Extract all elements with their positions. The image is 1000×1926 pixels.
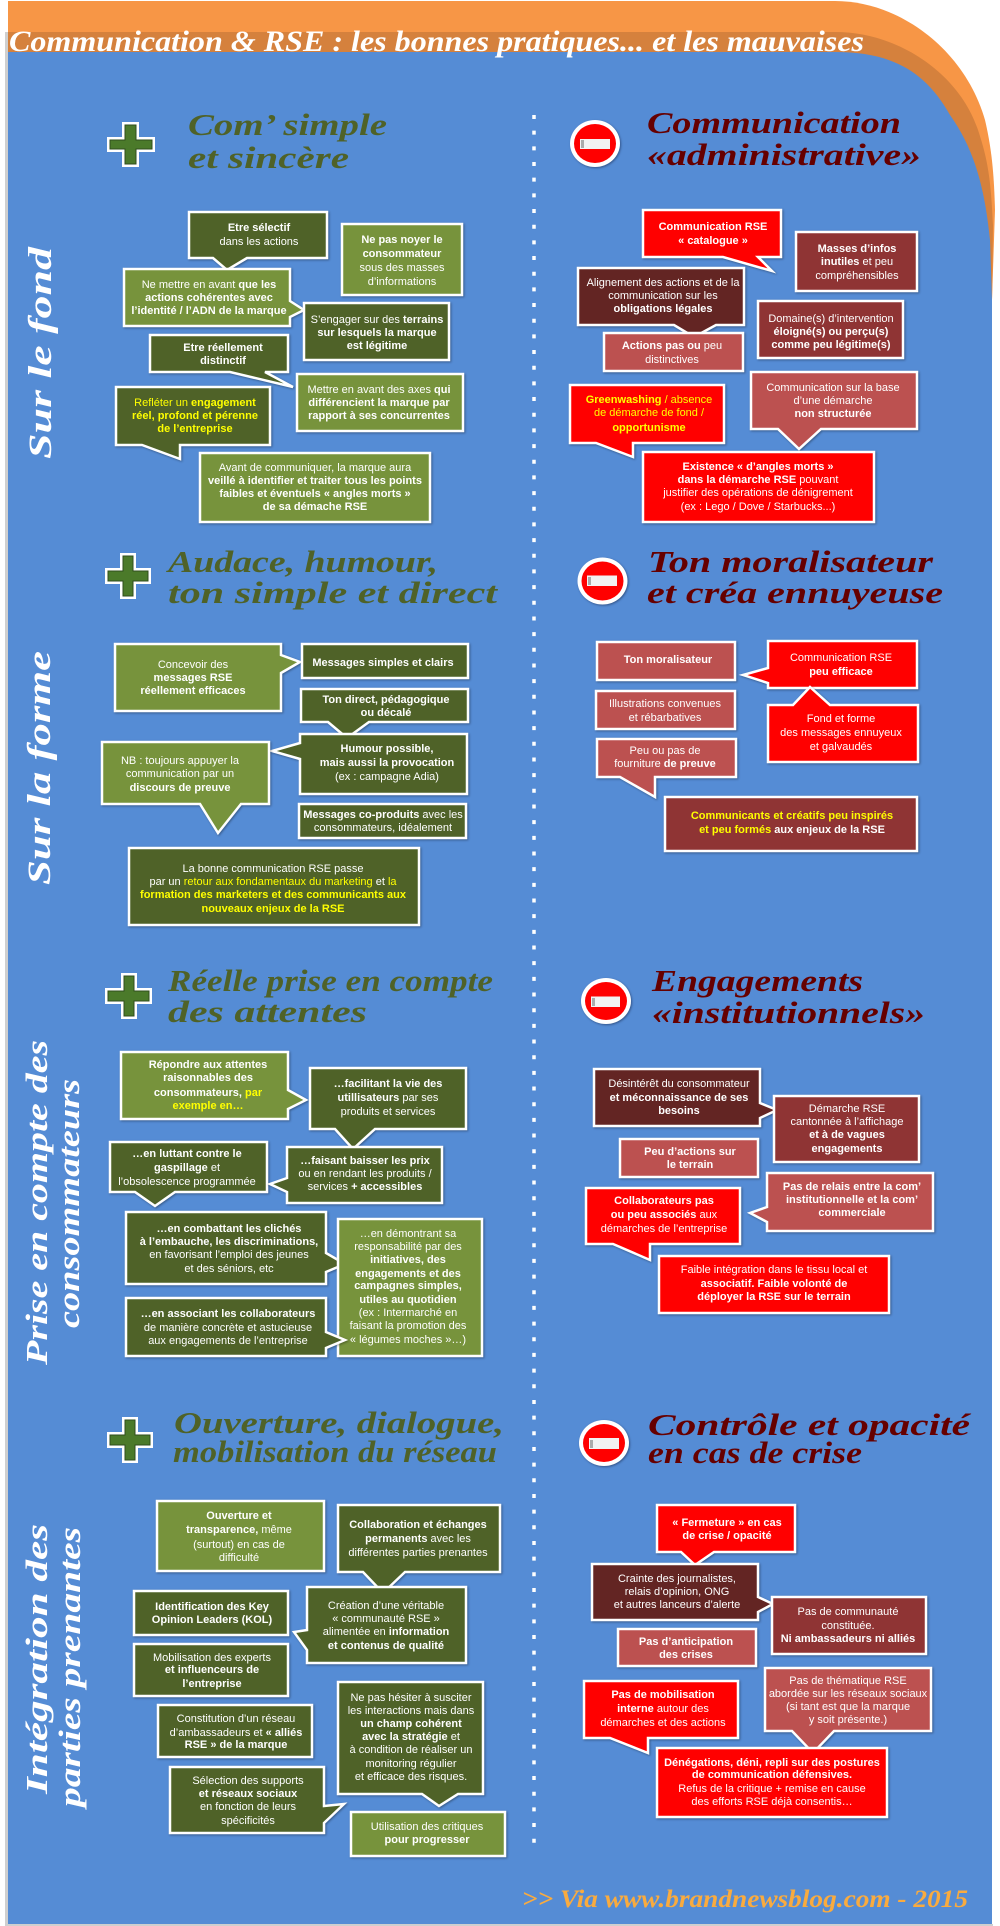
callout: en luttant: …en luttant contre le bbox=[132, 1148, 242, 1160]
callout: Collaboration bbox=[338, 1505, 500, 1593]
callout: Ton direct: ou décalé bbox=[361, 707, 411, 719]
callout: Pas de thématique RSE: Pas de thématique RSE bbox=[789, 1675, 907, 1687]
box: Pas de communauté: Ni ambassadeurs ni alliés bbox=[781, 1633, 915, 1645]
callout: Etre réellement distinctif: distinctif bbox=[200, 355, 246, 367]
callout: Refléter un engagement: réel, profond et pérenne bbox=[132, 410, 258, 422]
box: Mettre en avant des axes: différencient la marque par bbox=[308, 397, 450, 409]
box: Faible intégration: Faible intégration dans le tissu local et bbox=[681, 1264, 867, 1276]
callout: Humour: (ex : campagne Adia) bbox=[335, 771, 439, 783]
callout: en associant: de manière concrète et astucieuse bbox=[144, 1322, 312, 1334]
box: Démarche RSE: engagements bbox=[812, 1143, 882, 1155]
icon: no entry bbox=[578, 558, 628, 604]
callout: Concevoir bbox=[115, 644, 300, 711]
box: Domaine(s): comme peu légitime(s) bbox=[771, 339, 891, 351]
heading: mobilisation du réseau bbox=[173, 1434, 497, 1469]
heading bbox=[173, 1405, 504, 1469]
footer credit: >> Via www.brandnewsblog.com - 2015 bbox=[522, 1886, 968, 1913]
box: Ne pas noyer bbox=[342, 224, 462, 295]
main title: Communication & RSE : les bonnes pratiques... et les mauvaises bbox=[9, 25, 864, 58]
box: Pas de communauté: constituée. bbox=[821, 1620, 875, 1632]
panel: Engagements institutionnels bbox=[581, 963, 933, 1313]
box: Ouverture et transparence: (surtout) en cas de bbox=[193, 1539, 285, 1551]
callout: NB: communication par un bbox=[126, 768, 234, 780]
callout: Alignement: obligations légales bbox=[613, 303, 713, 315]
callout: Fermeture bbox=[657, 1505, 795, 1565]
callout: Peu ou pas de fourniture de preuve: fourniture de preuve bbox=[614, 758, 716, 770]
box: Utilisation des critiques: pour progresser bbox=[385, 1834, 470, 1846]
box: Constitution réseau: d’ambassadeurs et « alliés bbox=[170, 1727, 302, 1739]
callout: NB: NB : toujours appuyer la bbox=[121, 755, 240, 767]
callout: Création communauté: Création d’une véritable bbox=[328, 1600, 444, 1612]
box: S'engager: S’engager sur des terrains bbox=[311, 314, 443, 326]
box: Démarche RSE: et à de vagues bbox=[809, 1129, 885, 1141]
callout: Communication RSE catalogue: « catalogue » bbox=[678, 235, 748, 247]
callout: Communication RSE peu efficace: Communication RSE bbox=[790, 652, 892, 664]
callout: Fermeture: « Fermeture » en cas bbox=[672, 1517, 782, 1529]
heading: Audace, humour, bbox=[166, 544, 438, 579]
box: Dénégations: de communication défensives. bbox=[692, 1769, 852, 1781]
box: Actions pas ou peu: Actions pas ou peu bbox=[622, 340, 722, 352]
panel: Ton moralisateur bbox=[578, 544, 943, 851]
box: S'engager: est légitime bbox=[347, 340, 407, 352]
box: La bonne communication: formation des marketers et des communicants aux bbox=[140, 889, 407, 901]
box: Dénégations: des efforts RSE déjà consentis… bbox=[691, 1796, 853, 1808]
box: Actions pas ou peu bbox=[604, 333, 743, 371]
callout: en luttant: gaspillage et bbox=[154, 1162, 220, 1174]
box: Messages co-produits bbox=[299, 804, 466, 838]
box: Ton moralisateur bbox=[597, 642, 735, 680]
box: Actions pas ou peu: distinctives bbox=[645, 354, 699, 366]
callout: Communication RSE peu efficace bbox=[743, 641, 917, 688]
callout: Pas de thématique RSE: y soit présente.) bbox=[809, 1714, 887, 1726]
callout: en combattant: …en combattant les clichés bbox=[157, 1223, 301, 1235]
box: Peu d'actions: le terrain bbox=[667, 1159, 714, 1171]
callout: Etre sélectif: Etre sélectif bbox=[228, 222, 291, 234]
callout: Collaborateurs: démarches de l’entreprise bbox=[601, 1223, 727, 1235]
box: Masses d'infos: Masses d’infos bbox=[818, 243, 896, 255]
box: Dénégations: Refus de la critique + remise en cause bbox=[678, 1783, 866, 1795]
callout: Création communauté bbox=[294, 1587, 466, 1663]
callout: en luttant bbox=[110, 1142, 267, 1206]
callout: Fond et forme bbox=[768, 687, 918, 762]
callout: Désintérêt: Désintérêt du consommateur bbox=[608, 1078, 750, 1090]
box: Ne pas noyer: d’informations bbox=[368, 276, 437, 288]
callout: en combattant: et des séniors, etc bbox=[184, 1263, 274, 1275]
box: Mettre en avant des axes: Mettre en avant des axes qui bbox=[307, 384, 451, 396]
box: Communicants et créatifs: et peu formés aux enjeux de la RSE bbox=[699, 824, 885, 836]
callout: Concevoir: Concevoir des bbox=[158, 659, 229, 671]
callout: faisant baisser: services + accessibles bbox=[308, 1181, 422, 1193]
callout: Crainte des journalistes: relais d’opinion, ONG bbox=[625, 1586, 729, 1598]
callout: Communication RSE catalogue bbox=[643, 210, 781, 271]
callout: Communication non structurée: d’une démarche bbox=[794, 395, 872, 407]
heading bbox=[648, 1407, 972, 1470]
callout: Collaboration: permanents avec les bbox=[365, 1533, 471, 1545]
icon: plus bbox=[105, 973, 152, 1019]
box: Communicants et créatifs bbox=[665, 797, 917, 851]
callout: Fermeture: de crise / opacité bbox=[682, 1530, 772, 1542]
callout: Pas de thématique RSE: abordée sur les réseaux sociaux bbox=[769, 1688, 928, 1700]
callout: Désintérêt: besoins bbox=[658, 1105, 700, 1117]
box: Mobilisation des experts: Mobilisation des experts bbox=[153, 1652, 271, 1664]
side label: Intégration des parties prenantes bbox=[19, 1524, 87, 1811]
panel: Audace, humour bbox=[102, 544, 499, 925]
callout: Ne pas hésiter: Ne pas hésiter à susciter bbox=[350, 1692, 472, 1704]
box: Dénégations bbox=[657, 1748, 887, 1817]
callout: Greenwashing: de démarche de fond / bbox=[594, 407, 705, 419]
panel: Réelle prise en compte des attentes bbox=[105, 963, 493, 1356]
callout: Ne pas hésiter: monitoring régulier bbox=[365, 1758, 457, 1770]
callout: Création communauté: et contenus de qualité bbox=[328, 1640, 444, 1652]
callout: faisant baisser bbox=[270, 1147, 442, 1203]
callout: Peu ou pas de fourniture de preuve bbox=[597, 739, 736, 797]
box: La bonne communication bbox=[129, 848, 419, 925]
callout: Sélection des supports: et réseaux sociaux bbox=[199, 1788, 298, 1800]
box: Existence d'angles morts: Existence « d’angles morts » bbox=[682, 461, 834, 473]
box: en démontrant bbox=[338, 1219, 482, 1356]
box: Ne pas noyer: consommateur bbox=[363, 248, 442, 260]
callout: Répondre aux attentes: consommateurs, par bbox=[154, 1087, 263, 1099]
callout: en combattant: à l’embauche, les discriminations, bbox=[140, 1236, 318, 1248]
heading: Contrôle et opacité bbox=[648, 1407, 972, 1442]
box: Domaine(s): Domaine(s) d’intervention bbox=[768, 313, 894, 325]
heading: Réelle prise en compte bbox=[167, 963, 493, 998]
heading: en cas de crise bbox=[648, 1435, 862, 1470]
callout: Répondre aux attentes bbox=[121, 1052, 306, 1119]
callout: Humour: mais aussi la provocation bbox=[320, 757, 455, 769]
heading: Ton moralisateur bbox=[648, 544, 934, 579]
box: en démontrant: utiles au quotidien bbox=[359, 1294, 457, 1306]
callout: Communication RSE peu efficace: peu efficace bbox=[809, 666, 873, 678]
box: Dénégations: Dénégations, déni, repli sur des postures bbox=[664, 1757, 880, 1769]
box: Identification KOL: Opinion Leaders (KOL) bbox=[152, 1614, 273, 1626]
panel: Contrôle et opacité bbox=[579, 1407, 972, 1817]
box: Mettre en avant des axes: rapport à ses concurrentes bbox=[308, 410, 450, 422]
icon: plus bbox=[107, 1417, 153, 1463]
callout: Greenwashing bbox=[570, 385, 724, 457]
callout: Concevoir: réellement efficaces bbox=[140, 685, 246, 697]
callout: Ne pas hésiter: et efficace des risques. bbox=[355, 1771, 467, 1783]
heading: Engagements bbox=[651, 963, 863, 998]
box: en démontrant: faisant la promotion des bbox=[350, 1320, 467, 1332]
box: Messages co-produits: Messages co-produits avec les bbox=[303, 809, 463, 821]
callout: Sélection des supports bbox=[170, 1767, 344, 1833]
panel: Communication administrative bbox=[570, 105, 921, 522]
callout: Ne pas hésiter bbox=[338, 1682, 483, 1806]
box: Illustrations: Illustrations convenues bbox=[609, 698, 721, 710]
callout: Pas de mobilisation: démarches et des actions bbox=[600, 1717, 726, 1729]
box: en démontrant: (ex : Intermarché en bbox=[359, 1307, 457, 1319]
callout: Ne mettre en avant: Ne mettre en avant que les bbox=[142, 279, 276, 291]
callout: Désintérêt bbox=[594, 1069, 777, 1126]
box: Existence d'angles morts: (ex : Lego / Dove / Starbucks...) bbox=[681, 501, 835, 513]
callout: Etre sélectif bbox=[189, 212, 327, 270]
box: Identification KOL bbox=[134, 1591, 288, 1635]
callout: Concevoir: messages RSE bbox=[154, 672, 232, 684]
box: Illustrations bbox=[596, 691, 735, 729]
callout: Pas de mobilisation: Pas de mobilisation bbox=[611, 1689, 715, 1701]
heading: ton simple et direct bbox=[168, 575, 499, 610]
heading: «administrative» bbox=[647, 137, 921, 172]
callout: faisant baisser: …faisant baisser les prix bbox=[300, 1155, 431, 1167]
central dotted divider bbox=[532, 115, 536, 1854]
callout: Communication non structurée: non structurée bbox=[794, 408, 872, 420]
callout: Crainte des journalistes: Crainte des journalistes, bbox=[618, 1573, 736, 1585]
callout: Humour: Humour possible, bbox=[341, 743, 433, 755]
box: Masses d'infos bbox=[796, 232, 917, 291]
panel: Ouverture, dialogue bbox=[107, 1405, 505, 1856]
callout: Refléter un engagement: de l’entreprise bbox=[157, 423, 233, 435]
callout: Répondre aux attentes: raisonnables des bbox=[163, 1072, 253, 1084]
box: Avant de communiquer: faibles et éventuels « angles morts » bbox=[219, 488, 411, 500]
heading: Ouverture, dialogue, bbox=[174, 1405, 504, 1440]
callout: Peu ou pas de fourniture de preuve: Peu ou pas de bbox=[630, 745, 700, 757]
callout: Répondre aux attentes: exemple en… bbox=[173, 1100, 243, 1112]
box: en démontrant: engagements et des bbox=[355, 1268, 461, 1280]
callout: facilitant: produits et services bbox=[341, 1106, 436, 1118]
box: Pas de communauté bbox=[772, 1597, 926, 1654]
callout: Sélection des supports: en fonction de leurs bbox=[200, 1801, 297, 1813]
box: en démontrant: initiatives, des bbox=[370, 1254, 446, 1266]
icon: no entry bbox=[579, 1420, 629, 1466]
side label: Prise en compte des consommateurs: consommateurs bbox=[51, 1079, 86, 1328]
heading bbox=[647, 544, 943, 610]
box: La bonne communication: La bonne communication RSE passe bbox=[182, 863, 364, 875]
box: Pas d'anticipation: Pas d’anticipation bbox=[639, 1636, 733, 1648]
callout: Ne mettre en avant: actions cohérentes avec bbox=[145, 292, 273, 304]
box: Démarche RSE: Démarche RSE bbox=[809, 1103, 885, 1115]
icon: plus bbox=[105, 553, 151, 599]
callout: Pas de relais: Pas de relais entre la com’ bbox=[783, 1181, 921, 1193]
callout: Greenwashing: Greenwashing / absence bbox=[586, 394, 712, 406]
heading bbox=[166, 544, 499, 610]
box: Faible intégration: déployer la RSE sur le terrain bbox=[697, 1291, 851, 1303]
callout: en associant: …en associant les collaborateurs bbox=[141, 1308, 315, 1320]
box: Mettre en avant des axes bbox=[297, 374, 463, 431]
heading bbox=[188, 107, 387, 175]
callout: Etre réellement distinctif: Etre réellement bbox=[183, 342, 263, 354]
heading bbox=[651, 963, 925, 1030]
callout: Fond et forme: des messages ennuyeux bbox=[780, 727, 902, 739]
callout: Collaboration: différentes parties prenantes bbox=[348, 1547, 488, 1559]
callout: Ne pas hésiter: un champ cohérent bbox=[360, 1718, 462, 1730]
box: Constitution réseau: Constitution d’un réseau bbox=[177, 1713, 295, 1725]
box: Existence d'angles morts: justifier des opérations de dénigrement bbox=[662, 487, 853, 499]
box: Avant de communiquer: veillé à identifier et traiter tous les points bbox=[208, 475, 422, 487]
callout: Greenwashing: opportunisme bbox=[612, 422, 686, 434]
icon: no entry bbox=[581, 978, 631, 1024]
box: Mobilisation des experts: et influenceurs de bbox=[165, 1664, 259, 1676]
callout: facilitant: utillisateurs par ses bbox=[338, 1092, 439, 1104]
callout: en associant: aux engagements de l’entreprise bbox=[148, 1335, 308, 1347]
callout: Etre sélectif: dans les actions bbox=[220, 236, 299, 248]
callout: en combattant: en favorisant l’emploi des jeunes bbox=[149, 1249, 309, 1261]
box: Mobilisation des experts: l’entreprise bbox=[182, 1678, 242, 1690]
callout: Pas de thématique RSE bbox=[765, 1668, 931, 1753]
box: en démontrant: …en démontrant sa bbox=[360, 1228, 457, 1240]
box: Ouverture et transparence: Ouverture et bbox=[206, 1510, 272, 1522]
box: Utilisation des critiques: Utilisation des critiques bbox=[371, 1821, 484, 1833]
box: Identification KOL: Identification des Key bbox=[155, 1601, 270, 1613]
callout: Sélection des supports: Sélection des supports bbox=[192, 1775, 304, 1787]
box: Mobilisation des experts bbox=[134, 1644, 288, 1696]
callout: Alignement: communication sur les bbox=[608, 290, 718, 302]
callout: Désintérêt: et méconnaissance de ses bbox=[610, 1092, 748, 1104]
callout: en combattant bbox=[126, 1212, 345, 1284]
box: Constitution réseau: RSE » de la marque bbox=[185, 1739, 287, 1751]
callout: Collaborateurs bbox=[586, 1188, 740, 1260]
box: Ton moralisateur: Ton moralisateur bbox=[624, 654, 713, 666]
callout: Ne mettre en avant: l’identité / l’ADN de la marque bbox=[131, 305, 287, 317]
heading: Communication bbox=[647, 105, 901, 140]
callout: facilitant bbox=[310, 1068, 466, 1149]
callout: Communication non structurée bbox=[751, 372, 917, 449]
box: La bonne communication: nouveaux enjeux de la RSE bbox=[201, 903, 345, 915]
box: en démontrant: responsabilité par des bbox=[354, 1241, 462, 1253]
box: Existence d'angles morts bbox=[643, 452, 874, 522]
heading bbox=[167, 963, 493, 1029]
box: Peu d'actions: Peu d’actions sur bbox=[644, 1146, 737, 1158]
callout: Crainte des journalistes: et autres lanceurs d’alerte bbox=[614, 1599, 740, 1611]
callout: en luttant: l’obsolescence programmée bbox=[118, 1176, 256, 1188]
box: Existence d'angles morts: dans la démarche RSE pouvant bbox=[678, 474, 838, 486]
callout: Pas de relais bbox=[750, 1173, 933, 1231]
callout: Pas de mobilisation bbox=[584, 1681, 738, 1753]
callout: Ne mettre en avant bbox=[124, 269, 304, 326]
callout: NB: discours de preuve bbox=[130, 782, 230, 794]
box: Messages simples: Messages simples et clairs bbox=[312, 657, 454, 669]
callout: Alignement bbox=[578, 268, 744, 337]
callout: Création communauté: « communauté RSE » bbox=[332, 1613, 440, 1625]
side label: Prise en compte des consommateurs: Prise en compte des bbox=[19, 1040, 54, 1366]
box: en démontrant: campagnes simples, bbox=[354, 1280, 462, 1292]
icon: no entry bbox=[570, 120, 620, 167]
box: Avant de communiquer: de sa démache RSE bbox=[263, 501, 367, 513]
callout: Refléter un engagement bbox=[116, 387, 270, 459]
callout: Création communauté: alimentée en information bbox=[323, 1626, 450, 1638]
callout: en associant bbox=[126, 1298, 345, 1356]
callout: Pas de thématique RSE: (si tant est que la marque bbox=[786, 1701, 910, 1713]
callout: Alignement: Alignement des actions et de la bbox=[587, 277, 740, 289]
box: Faible intégration: associatif. Faible volonté de bbox=[701, 1278, 847, 1290]
heading bbox=[647, 105, 921, 172]
callout: Pas de mobilisation: interne autour des bbox=[617, 1703, 709, 1715]
box: Ouverture et transparence: transparence, même bbox=[186, 1524, 292, 1536]
box: Masses d'infos: inutiles et peu bbox=[821, 256, 893, 268]
side label: Sur le fond: Sur le fond bbox=[23, 246, 59, 459]
box: Ne pas noyer: Ne pas noyer le bbox=[361, 234, 443, 246]
box: Masses d'infos: compréhensibles bbox=[815, 270, 899, 282]
callout: Collaboration: Collaboration et échanges bbox=[349, 1519, 487, 1531]
callout: Ne pas hésiter: à condition de réaliser un bbox=[350, 1744, 472, 1756]
box: Messages co-produits: consommateurs, idéalement bbox=[314, 822, 452, 834]
box: Ne pas noyer: sous des masses bbox=[360, 262, 445, 274]
box: S'engager bbox=[304, 303, 449, 360]
box: Pas de communauté: Pas de communauté bbox=[798, 1606, 898, 1618]
callout: Fond et forme: et galvaudés bbox=[810, 741, 873, 753]
callout: Communication RSE catalogue: Communication RSE bbox=[659, 221, 767, 233]
box: Communicants et créatifs: Communicants et créatifs peu inspirés bbox=[691, 810, 893, 822]
callout: Ne pas hésiter: avec la stratégie et bbox=[362, 1731, 460, 1743]
callout: Collaborateurs: ou peu associés aux bbox=[611, 1209, 718, 1221]
box: en démontrant: « légumes moches »…) bbox=[350, 1334, 466, 1346]
callout: facilitant: …facilitant la vie des bbox=[334, 1078, 442, 1090]
callout: NB bbox=[102, 742, 269, 833]
box: Messages simples bbox=[302, 644, 468, 678]
side label: Prise en compte des consommateurs bbox=[19, 1040, 86, 1366]
box: Domaine(s): éloigné(s) ou perçu(s) bbox=[774, 326, 889, 338]
callout: Communication non structurée: Communication sur la base bbox=[766, 382, 900, 394]
heading: et créa ennuyeuse bbox=[647, 575, 943, 610]
side label: Sur la forme: Sur la forme bbox=[22, 651, 58, 885]
callout: Ton direct bbox=[301, 689, 468, 738]
box: Démarche RSE bbox=[774, 1096, 919, 1162]
callout: Répondre aux attentes: Répondre aux attentes bbox=[149, 1059, 267, 1071]
callout: Collaborateurs: Collaborateurs pas bbox=[614, 1195, 714, 1207]
callout: Refléter un engagement: Refléter un engagement bbox=[134, 397, 256, 409]
box: Faible intégration bbox=[659, 1256, 889, 1313]
callout: Crainte des journalistes bbox=[592, 1564, 773, 1620]
callout: Fond et forme: Fond et forme bbox=[807, 713, 875, 725]
box: S'engager: sur lesquels la marque bbox=[317, 327, 437, 339]
callout: faisant baisser: ou en rendant les produits / bbox=[298, 1168, 433, 1180]
callout: Sélection des supports: spécificités bbox=[221, 1815, 275, 1827]
callout: Humour bbox=[272, 734, 467, 794]
heading: «institutionnels» bbox=[652, 995, 925, 1030]
heading: Com’ simple bbox=[188, 107, 387, 142]
box: Avant de communiquer bbox=[200, 453, 430, 522]
icon: plus bbox=[107, 122, 155, 167]
box: Illustrations: et rébarbatives bbox=[629, 712, 702, 724]
side label: Intégration des parties prenantes: parties prenantes bbox=[52, 1527, 87, 1811]
box: La bonne communication: par un retour aux fondamentaux du marketing et la bbox=[149, 876, 397, 888]
box: Utilisation des critiques bbox=[351, 1812, 505, 1856]
box: Pas d'anticipation bbox=[618, 1629, 756, 1666]
panel: Com' simple et sincère bbox=[107, 107, 463, 522]
callout: Pas de relais: commerciale bbox=[818, 1207, 886, 1219]
box: Ouverture et transparence bbox=[157, 1501, 324, 1571]
box: Constitution réseau bbox=[158, 1705, 312, 1757]
box: Avant de communiquer: Avant de communiquer, la marque aura bbox=[219, 462, 412, 474]
heading: et sincère bbox=[188, 140, 349, 175]
callout: Ne pas hésiter: les interactions mais dans bbox=[348, 1705, 475, 1717]
box: Ouverture et transparence: difficulté bbox=[219, 1552, 259, 1564]
callout: Ton direct: Ton direct, pédagogique bbox=[323, 694, 449, 706]
callout: Pas de relais: institutionnelle et la com’ bbox=[786, 1194, 918, 1206]
callout: Etre réellement distinctif bbox=[150, 335, 293, 387]
side label: Intégration des parties prenantes: Intégration des bbox=[19, 1524, 54, 1795]
heading: des attentes bbox=[168, 994, 367, 1029]
box: Domaine(s) bbox=[758, 301, 903, 358]
box: Peu d'actions bbox=[620, 1139, 758, 1177]
box: Démarche RSE: cantonnée à l’affichage bbox=[791, 1116, 903, 1128]
box: Pas d'anticipation: des crises bbox=[659, 1649, 713, 1661]
